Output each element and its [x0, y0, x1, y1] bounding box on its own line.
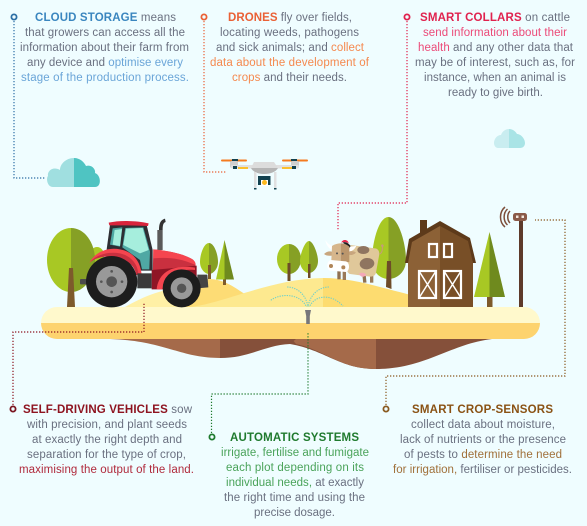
- text: cloud storage: any device and optimise every: [27, 57, 183, 69]
- island underside: [110, 339, 492, 369]
- text: automatic systems: the right time and using the: [224, 492, 365, 504]
- text: automatic systems: irrigate, fertilise and fumigate: [221, 447, 369, 459]
- text: cloud storage: that growers can access all the: [25, 27, 185, 39]
- cow: [324, 240, 384, 283]
- smart crop sensor: [500, 207, 527, 308]
- text: drones: locating weeds, pathogens: [220, 27, 359, 39]
- text: smart collars: [415, 12, 575, 99]
- text: smart collars: health and any other data that: [418, 42, 574, 54]
- text: smart crop-sensors: [393, 404, 572, 476]
- text: cloud storage: [20, 12, 189, 84]
- text: smart crop-sensors: of pests to determine the need: [404, 449, 562, 461]
- text: automatic systems: AUTOMATIC SYSTEMS: [230, 432, 359, 444]
- text: cloud storage: CLOUD STORAGE means: [35, 12, 176, 24]
- hills: [125, 278, 470, 307]
- text: drones: and sick animals; and collect: [216, 42, 365, 54]
- text: self-driving vehicles: separation for the type of crop,: [27, 449, 186, 461]
- text: automatic systems: individual needs, at exactly: [226, 477, 364, 489]
- trees: middle pair: [277, 241, 318, 281]
- text: automatic systems: precise dosage.: [254, 507, 335, 519]
- tree: behind cow: [372, 217, 406, 289]
- text: smart collars: may be of interest, such as, for: [415, 57, 575, 69]
- sprinkler stem: [305, 310, 311, 324]
- sprinkler with water arcs: [270, 287, 343, 316]
- text: smart crop-sensors: collect data about moisture,: [411, 419, 555, 431]
- text: smart collars: send information about their: [423, 27, 567, 39]
- icon: small cloud: [494, 129, 525, 148]
- text: self-driving vehicles: with precision, and plant seeds: [26, 419, 187, 431]
- text: cloud storage: information about their farm from: [20, 42, 189, 54]
- text: smart crop-sensors: SMART CROP-SENSORS: [412, 404, 553, 416]
- text: drones: crops and their needs.: [232, 72, 347, 84]
- text: smart collars: instance, when an animal is: [424, 72, 566, 84]
- text: automatic systems: each plot depending on its: [226, 462, 364, 474]
- text: drones: [210, 12, 370, 84]
- tractor: [80, 219, 208, 307]
- text: self-driving vehicles: SELF-DRIVING VEHICLES sow: [23, 404, 193, 416]
- icon: large cloud: [47, 158, 100, 187]
- connector: automatic systems: [209, 332, 308, 440]
- text: self-driving vehicles: [19, 404, 194, 476]
- text: self-driving vehicles: at exactly the right depth and: [32, 434, 182, 446]
- connector: drones: [201, 14, 226, 172]
- connector: smart crop-sensors: [383, 220, 565, 412]
- tree: large left: [47, 228, 104, 307]
- tree: right of barn: [474, 232, 505, 307]
- text: smart collars: SMART COLLARS on cattle: [420, 12, 570, 24]
- connector: self-driving vehicles: [10, 303, 144, 412]
- text: cloud storage: stage of the production process.: [21, 72, 189, 84]
- connector: smart collars: [338, 14, 410, 230]
- icon: drone: [221, 159, 308, 190]
- connector: cloud storage: [11, 14, 46, 178]
- island platform: [41, 307, 540, 339]
- barn: [405, 220, 476, 307]
- text: drones: DRONES fly over fields,: [228, 12, 352, 24]
- text: smart crop-sensors: lack of nutrients or the presence: [400, 434, 566, 446]
- text: automatic systems: [221, 432, 369, 519]
- text: drones: data about the development of: [210, 57, 370, 69]
- trees: small behind tractor: [200, 240, 234, 285]
- text: smart crop-sensors: for irrigation, fertiliser or pesticides.: [393, 464, 572, 476]
- text: self-driving vehicles: maximising the output of the land.: [19, 464, 194, 476]
- text: smart collars: ready to give birth.: [448, 87, 543, 99]
- illustration: floating farm island: [41, 207, 540, 369]
